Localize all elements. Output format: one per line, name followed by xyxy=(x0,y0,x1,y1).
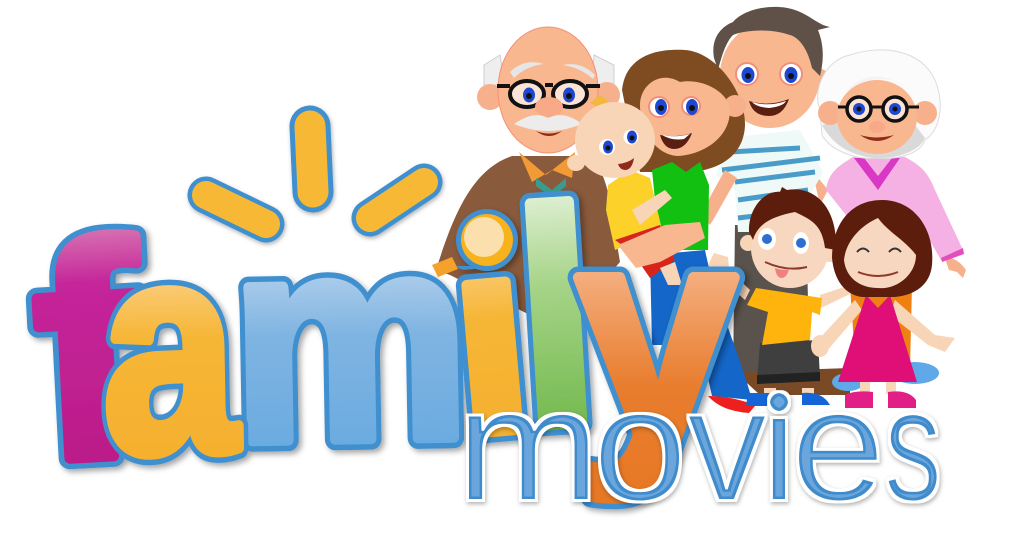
letter s: s xyxy=(884,355,942,534)
letter e: e xyxy=(791,355,885,534)
ray: right fill xyxy=(370,182,424,218)
letter a: a xyxy=(99,182,241,516)
letter y: y xyxy=(576,166,738,502)
sun rays xyxy=(206,126,424,224)
letter m: m xyxy=(229,176,472,504)
letter m: m xyxy=(456,356,600,535)
letter l: l xyxy=(507,146,606,492)
letter o: o xyxy=(593,355,687,534)
boy xyxy=(708,187,852,406)
letter i: i xyxy=(438,177,543,494)
wordmark: family xyxy=(26,190,750,516)
ray: left xyxy=(206,195,266,224)
baby xyxy=(567,95,705,285)
letter i: i xyxy=(761,355,797,534)
illustration: family group xyxy=(432,7,966,413)
letter v: v xyxy=(687,355,767,534)
dad xyxy=(706,7,850,395)
letter a: a xyxy=(99,182,241,516)
i dot xyxy=(456,209,518,271)
letter i: i xyxy=(438,177,543,494)
letter f: f xyxy=(26,178,153,524)
letter m: m xyxy=(229,176,472,504)
letter y: y xyxy=(576,166,738,502)
letter l: l xyxy=(507,146,606,492)
mum xyxy=(622,50,755,413)
wordmark: movies xyxy=(464,390,943,508)
girl xyxy=(811,200,955,408)
ray: right xyxy=(370,182,424,218)
letter f: f xyxy=(26,178,153,524)
ray: top xyxy=(310,126,313,192)
ray: left fill xyxy=(206,195,266,224)
ray: top fill xyxy=(310,126,313,192)
grandma xyxy=(818,50,966,391)
letter i xyxy=(456,266,533,450)
i dot xyxy=(769,392,789,412)
grandpa xyxy=(432,27,620,330)
